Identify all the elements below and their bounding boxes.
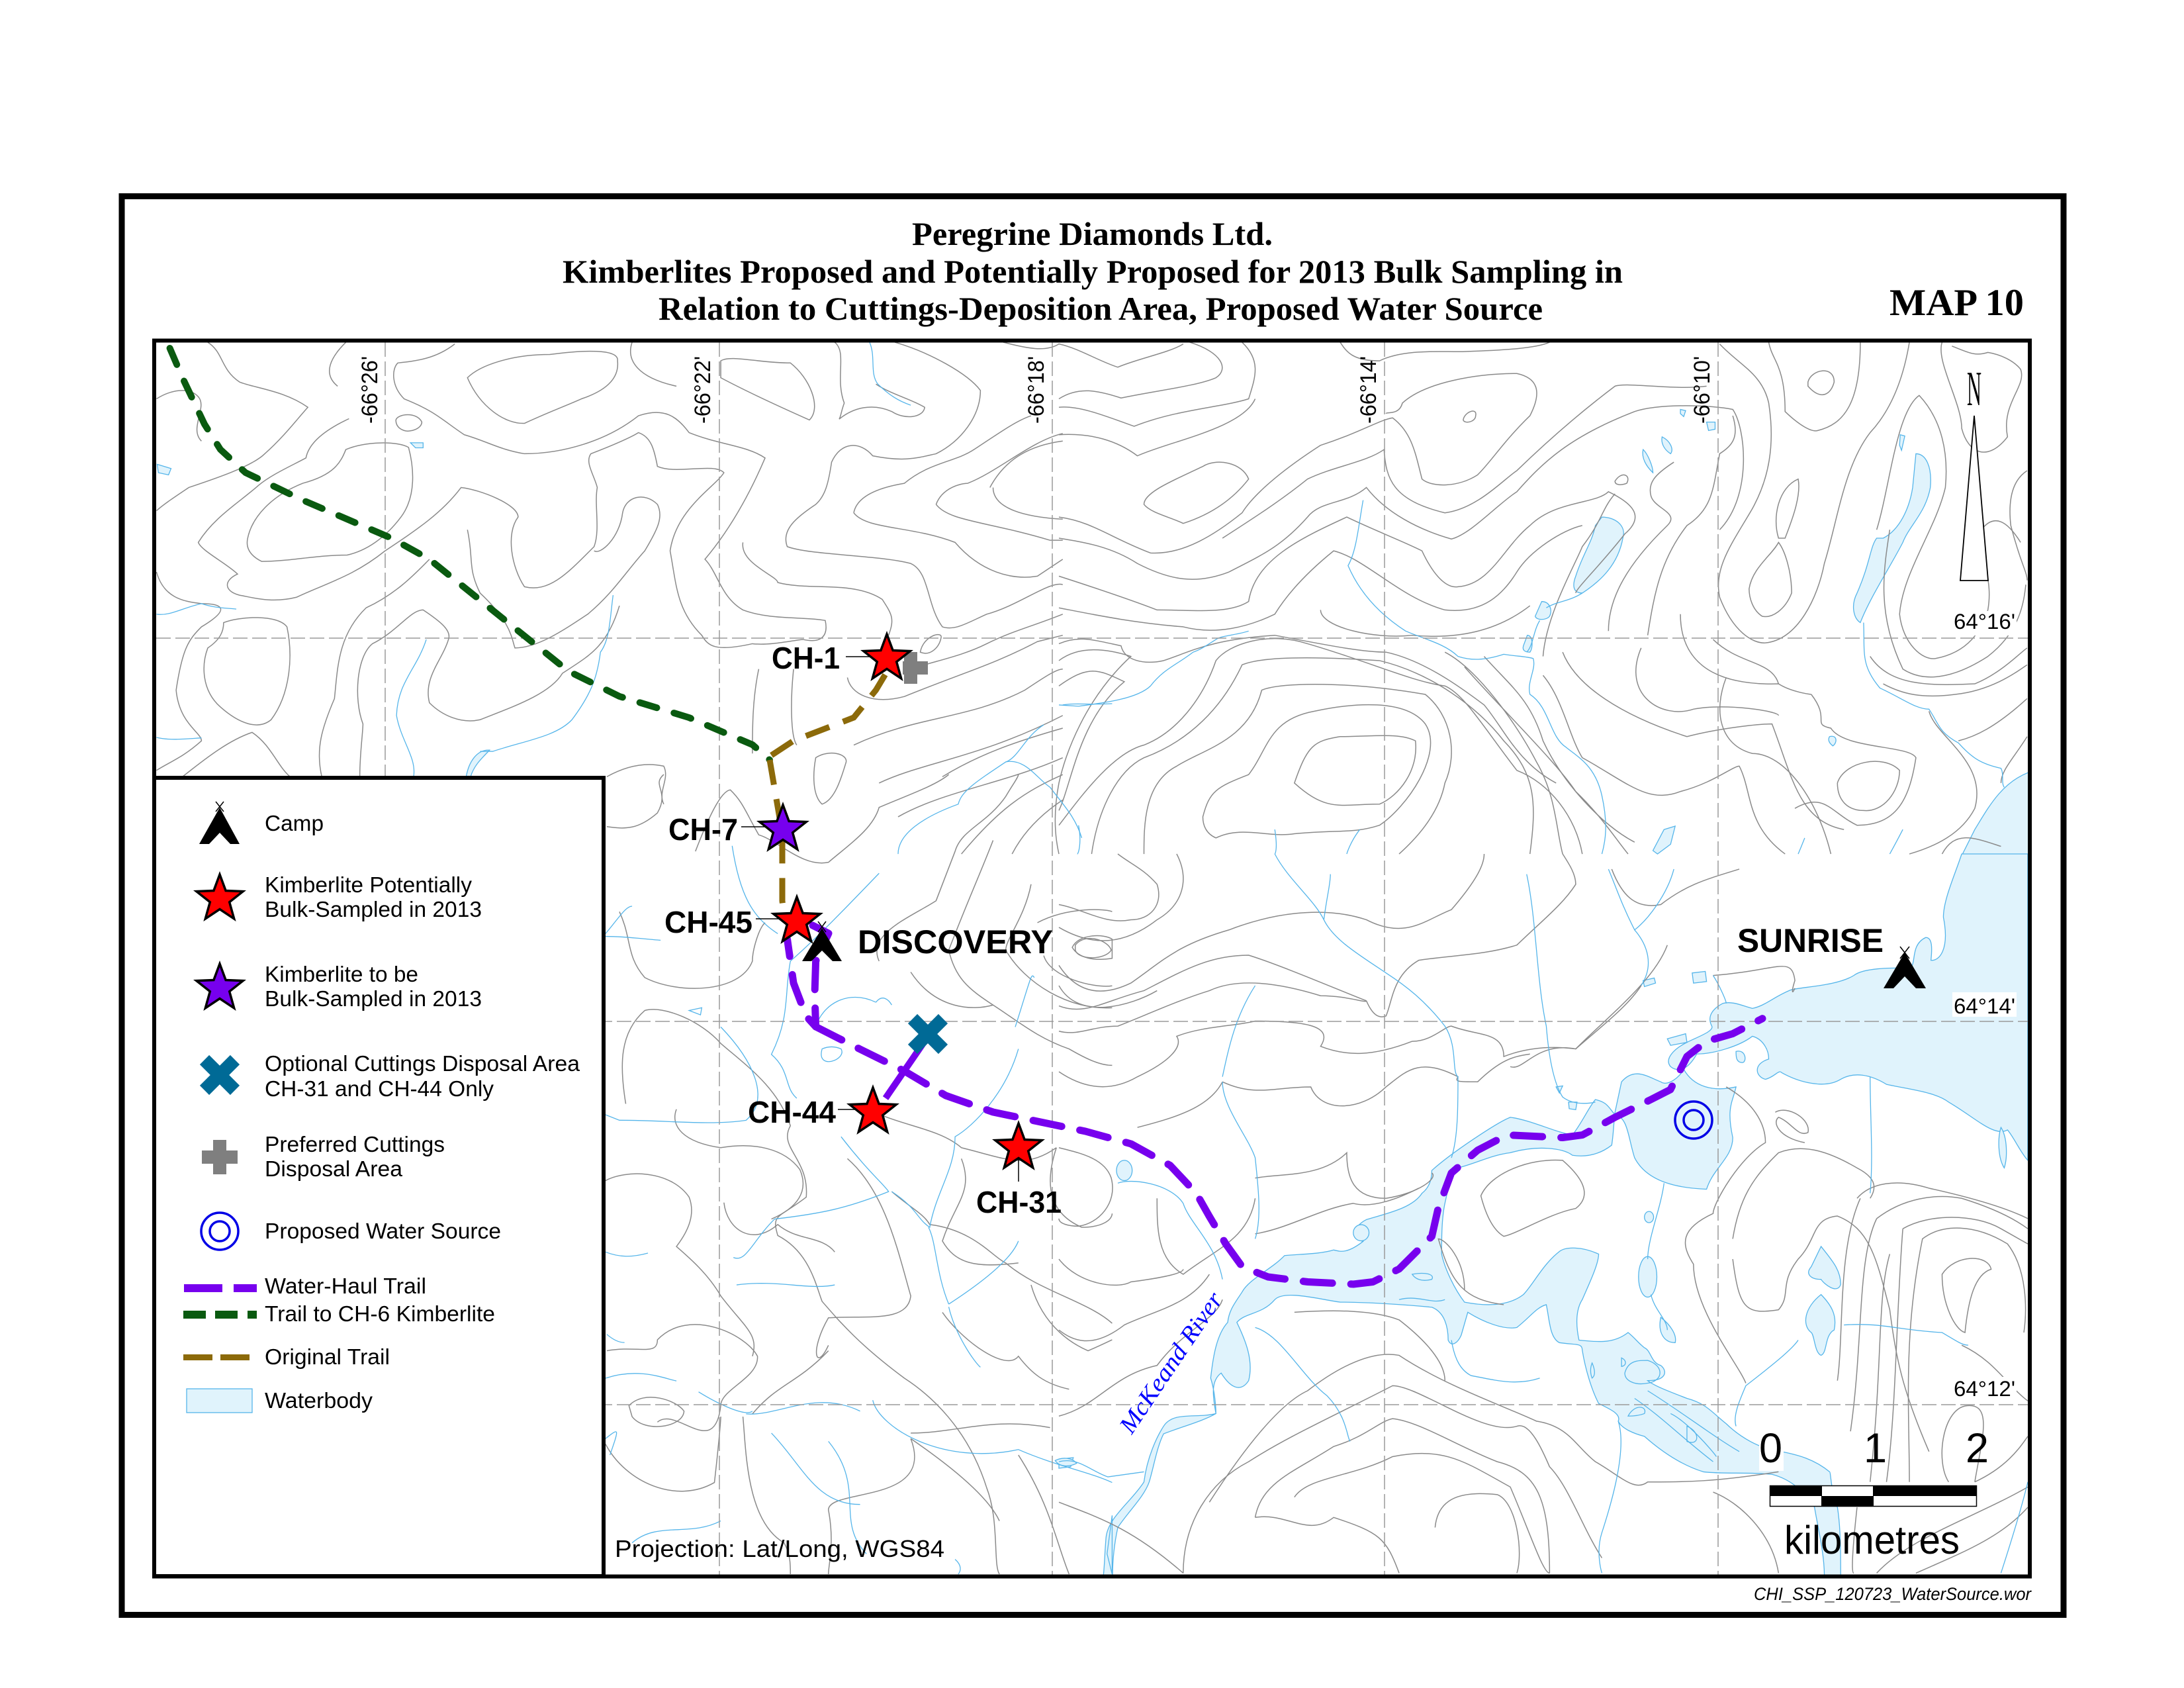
scale bar: kilometres — [1784, 1518, 1960, 1562]
star CH-44 — [850, 1088, 896, 1132]
outer page frame — [122, 196, 2064, 1615]
map number: MAP 10 — [1889, 282, 2024, 324]
legend icon: purple star — [197, 964, 243, 1008]
north arrow — [1960, 362, 1988, 581]
legend text: preferred cuttings — [265, 1132, 445, 1181]
title: Peregrine Diamonds Ltd. — [912, 215, 1273, 252]
longitude labels: -66°14' — [1356, 356, 1381, 424]
waterbodies — [157, 409, 2028, 1575]
site labels: DISCOVERY — [858, 923, 1053, 961]
legend text: to be sampled: Kimberlite to be — [265, 962, 418, 986]
title: Kimberlites Proposed and Potentially Proposed for 2013 Bulk Sampling in — [563, 253, 1623, 290]
longitude labels: -66°10' — [1690, 356, 1715, 424]
icon: camp Sunrise — [1884, 947, 1926, 988]
legend text: potentially sampled — [265, 872, 482, 921]
legend line: CH-6 trail — [183, 1311, 257, 1319]
site labels: CH-1 — [772, 641, 840, 675]
map frame — [154, 340, 2030, 1577]
legend text: camp: Camp — [265, 811, 324, 835]
site labels: SUNRISE — [1737, 922, 1884, 959]
site labels: CH-7 — [668, 812, 738, 847]
longitude labels — [357, 356, 1715, 424]
legend text: optional cuttings: CH-31 and CH-44 Only — [265, 1076, 494, 1101]
trail to CH-6 — [170, 348, 770, 760]
title: Relation to Cuttings-Deposition Area, Proposed Water Source — [659, 290, 1543, 327]
legend panel — [154, 778, 604, 1576]
site labels: CH-45 — [664, 905, 752, 939]
icon: preferred cuttings area on map — [903, 652, 928, 684]
legend text: original trail: Original Trail — [265, 1344, 390, 1369]
legend text: to be sampled — [265, 962, 482, 1011]
legend text: to be sampled: Bulk-Sampled in 2013 — [265, 986, 482, 1011]
site labels — [664, 641, 1884, 1219]
projection note: Projection: Lat/Long, WGS84 — [615, 1535, 944, 1562]
legend swatch: waterbody — [187, 1389, 252, 1413]
latitude labels: 64°16' — [1954, 610, 2015, 633]
legend icon: optional cuttings — [205, 1060, 235, 1090]
rivers and streams — [156, 342, 2028, 1574]
contour lines — [156, 342, 2028, 1574]
north arrow: N — [1967, 362, 1981, 416]
legend text: optional cuttings: Optional Cuttings Disposal Area — [265, 1051, 580, 1076]
site labels: CH-44 — [748, 1095, 836, 1129]
legend text: waterbody: Waterbody — [265, 1388, 373, 1413]
icon: proposed water source on map — [1675, 1102, 1712, 1139]
site leader lines — [741, 657, 1019, 1182]
legend text: CH-6 trail: Trail to CH-6 Kimberlite — [265, 1301, 495, 1326]
latitude labels: 64°12' — [1954, 1377, 2015, 1401]
legend icon: red star — [197, 874, 243, 919]
longitude labels: -66°26' — [357, 356, 383, 424]
legend line: water-haul trail — [184, 1284, 257, 1292]
scale bar: 0 — [1759, 1425, 1782, 1472]
legend text: preferred cuttings: Preferred Cuttings — [265, 1132, 445, 1156]
scale bar — [1759, 1425, 1989, 1562]
legend text: potentially sampled: Kimberlite Potentially — [265, 872, 473, 897]
star CH-45 — [774, 897, 820, 941]
legend line: original trail — [183, 1354, 250, 1360]
scale bar: 1 — [1864, 1425, 1887, 1472]
title — [563, 215, 1623, 327]
water-haul trail — [788, 925, 1762, 1284]
legend text: optional cuttings — [265, 1051, 580, 1101]
original trail — [770, 672, 887, 917]
star CH-1 — [864, 634, 910, 679]
river label: McKeand River — [1114, 1287, 1228, 1439]
longitude labels: -66°22' — [690, 356, 715, 424]
legend text: water-haul trail: Water-Haul Trail — [265, 1274, 426, 1298]
legend icon: preferred cuttings — [202, 1140, 238, 1174]
graticule lines — [156, 342, 2028, 1575]
spur to optional cuttings area — [886, 1043, 923, 1098]
icon: optional cuttings area on map — [913, 1019, 943, 1049]
workspace file name: CHI_SSP_120723_WaterSource.wor — [1754, 1584, 2032, 1604]
legend text: water source: Proposed Water Source — [265, 1219, 501, 1243]
site labels: CH-31 — [976, 1185, 1062, 1219]
icon: camp Discovery — [802, 921, 842, 961]
legend text: preferred cuttings: Disposal Area — [265, 1156, 403, 1181]
map panel — [156, 342, 2028, 1575]
legend icon: camp — [199, 802, 240, 844]
star CH-31 — [995, 1123, 1042, 1168]
star CH-7 — [760, 805, 806, 849]
legend icon: water source — [201, 1213, 238, 1250]
longitude labels: -66°18' — [1024, 356, 1049, 424]
scale bar: 2 — [1966, 1425, 1989, 1472]
latitude labels: 64°14' — [1954, 994, 2015, 1018]
latitude labels — [1952, 610, 2017, 1401]
legend text: potentially sampled: Bulk-Sampled in 2013 — [265, 897, 482, 921]
